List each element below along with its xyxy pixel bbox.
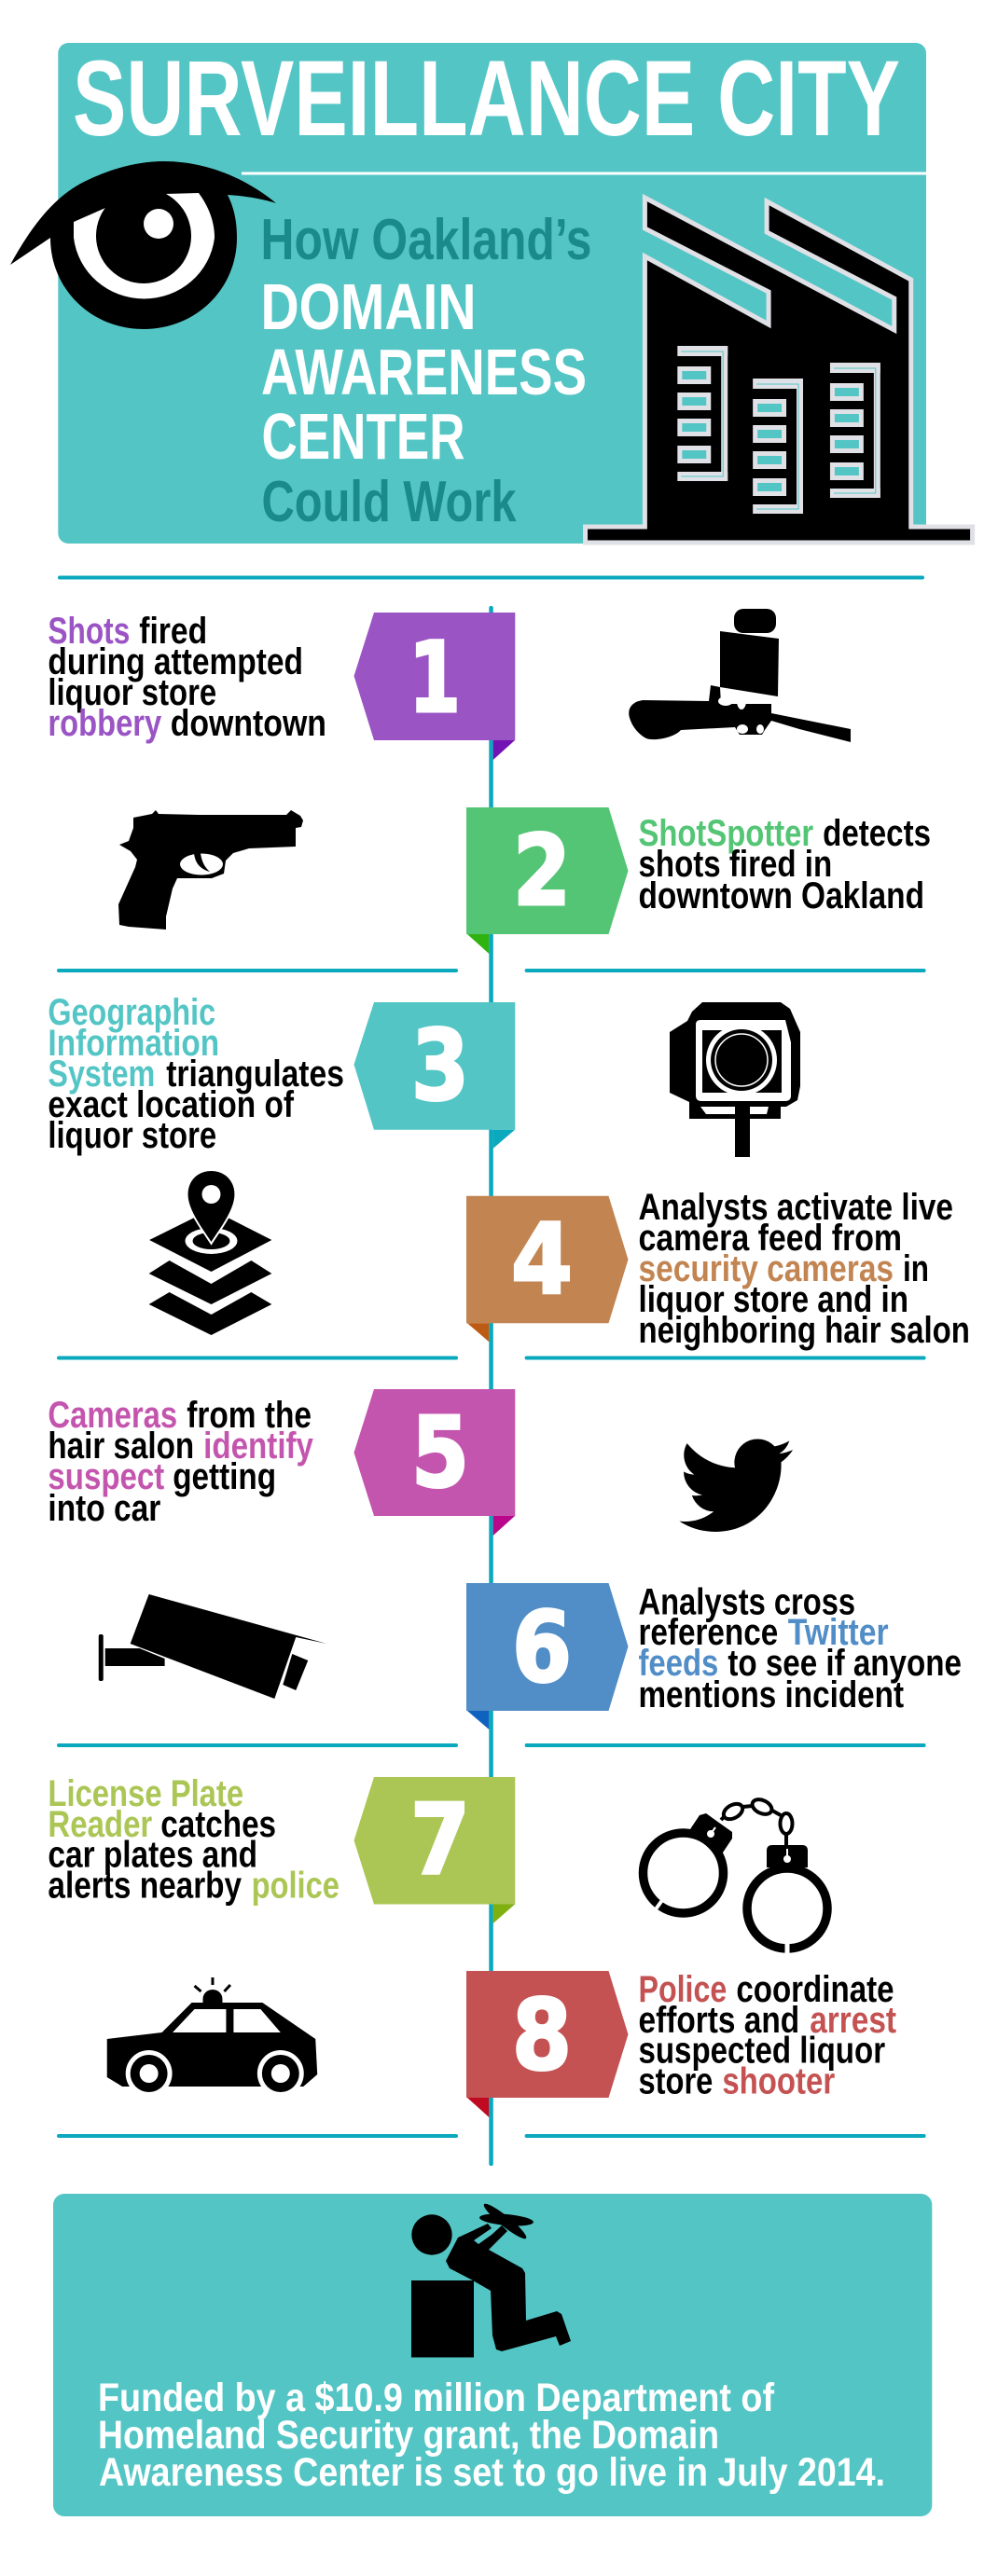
text 4: security cameras bbox=[638, 1248, 894, 1289]
text 8: store bbox=[638, 2060, 713, 2102]
step 4 bbox=[149, 1171, 970, 1351]
text 3: triangulates bbox=[166, 1054, 344, 1095]
dividers bbox=[57, 969, 926, 2138]
text 8: shooter bbox=[722, 2060, 835, 2102]
step 5 bbox=[48, 1389, 793, 1536]
text 6: feeds bbox=[638, 1643, 718, 1684]
step 8 bbox=[107, 1969, 896, 2117]
text 2: ShotSpotter bbox=[638, 813, 813, 854]
text 8: coordinate bbox=[736, 1969, 894, 2010]
timeline bbox=[489, 606, 493, 2166]
step 1 bbox=[48, 609, 851, 760]
footer text: Funded by a $10.9 million Department of bbox=[98, 2376, 775, 2420]
subtitle: CENTER bbox=[261, 400, 464, 473]
badge 4 bbox=[466, 1196, 629, 1342]
icon: security camera front bbox=[670, 1002, 800, 1157]
text 3: Geographic bbox=[48, 992, 215, 1033]
text 4 bbox=[638, 1187, 970, 1351]
subtitle: AWARENESS bbox=[261, 336, 587, 408]
badge 8: 8 bbox=[512, 1978, 572, 2092]
text 3: exact location of bbox=[48, 1084, 295, 1125]
text 3 bbox=[48, 992, 344, 1156]
text 7: License Plate bbox=[48, 1773, 243, 1814]
step 7 bbox=[48, 1773, 827, 1954]
text 2: shots fired in bbox=[638, 844, 832, 885]
text 7: alerts nearby bbox=[48, 1865, 242, 1907]
text 1 bbox=[48, 611, 326, 744]
text 8: arrest bbox=[810, 2000, 896, 2041]
text 1: fired bbox=[139, 611, 207, 652]
text 8: Police bbox=[638, 1969, 727, 2010]
subtitle: DOMAIN bbox=[261, 270, 476, 343]
text 7 bbox=[48, 1773, 340, 1907]
badge 1: 1 bbox=[409, 621, 461, 735]
text 2 bbox=[638, 813, 931, 916]
subtitle bbox=[261, 207, 591, 534]
badge 5 bbox=[354, 1389, 515, 1536]
text 4: camera feed from bbox=[638, 1218, 902, 1259]
badge 7 bbox=[354, 1777, 515, 1923]
text 8: efforts and bbox=[638, 2000, 799, 2041]
text 3: Information bbox=[48, 1023, 219, 1064]
icon: person playing with toy plane on block bbox=[411, 2200, 571, 2357]
text 4: liquor store and in bbox=[638, 1279, 908, 1320]
text 8: suspected liquor bbox=[638, 2031, 885, 2072]
text 5: into car bbox=[48, 1488, 160, 1529]
text 6: Twitter bbox=[788, 1612, 889, 1653]
text 3: liquor store bbox=[48, 1115, 216, 1156]
header background bbox=[58, 43, 926, 544]
badge 8 bbox=[466, 1971, 629, 2117]
text 5: identify bbox=[203, 1426, 313, 1467]
badge 5: 5 bbox=[411, 1396, 469, 1509]
header panel bbox=[10, 39, 973, 544]
badge 2 bbox=[466, 807, 629, 954]
text 1: robbery bbox=[48, 703, 161, 744]
icon: gunshot sensor bbox=[629, 609, 851, 742]
badge 3 bbox=[354, 1002, 515, 1149]
badge 6 bbox=[466, 1583, 629, 1729]
text 5: getting bbox=[173, 1456, 276, 1497]
text 1: liquor store bbox=[48, 672, 216, 713]
text 5 bbox=[48, 1395, 313, 1529]
icon: handcuffs bbox=[644, 1797, 827, 1954]
icon: cctv camera bbox=[99, 1594, 326, 1699]
text 4: in bbox=[903, 1248, 929, 1289]
icon: police car bbox=[107, 1977, 317, 2097]
badge 1 bbox=[354, 613, 515, 760]
icon: pistol bbox=[118, 810, 303, 930]
subtitle: How Oakland’s bbox=[261, 207, 591, 272]
text 6: mentions incident bbox=[638, 1674, 904, 1715]
step 6 bbox=[99, 1581, 962, 1729]
text 7: police bbox=[252, 1865, 340, 1907]
step 2 bbox=[118, 807, 931, 954]
text 7: Reader bbox=[48, 1804, 152, 1845]
text 5: Cameras bbox=[48, 1395, 177, 1436]
footer text bbox=[98, 2376, 885, 2495]
header divider bbox=[58, 576, 924, 580]
text 5: hair salon bbox=[48, 1426, 194, 1467]
text 7: catches bbox=[160, 1804, 276, 1845]
badge 3: 3 bbox=[411, 1009, 469, 1123]
footer text: Homeland Security grant, the Domain bbox=[98, 2413, 719, 2458]
icon: twitter bird bbox=[679, 1439, 793, 1532]
text 5: from the bbox=[187, 1395, 312, 1436]
step 3 bbox=[48, 992, 800, 1157]
text 8 bbox=[638, 1969, 896, 2102]
badge 6: 6 bbox=[512, 1591, 572, 1704]
footer panel bbox=[53, 2194, 932, 2516]
badge 7: 7 bbox=[410, 1783, 470, 1896]
text 1: Shots bbox=[48, 611, 130, 652]
icon: eye bbox=[10, 161, 276, 329]
footer text: Awareness Center is set to go live in July 2014. bbox=[99, 2450, 885, 2495]
badge 4: 4 bbox=[511, 1203, 573, 1316]
text 2: detects bbox=[823, 813, 931, 854]
text 6: reference bbox=[638, 1612, 778, 1653]
subtitle: Could Work bbox=[261, 469, 517, 534]
text 6: Analysts cross bbox=[638, 1581, 855, 1623]
footer background bbox=[53, 2194, 932, 2516]
badge 2: 2 bbox=[513, 814, 571, 928]
text 7: car plates and bbox=[48, 1834, 257, 1876]
text 2: downtown Oakland bbox=[638, 875, 924, 916]
text 3: System bbox=[48, 1054, 155, 1095]
text 5: suspect bbox=[48, 1456, 164, 1497]
icon: building bbox=[586, 198, 973, 543]
icon: map pin and layers bbox=[149, 1171, 271, 1335]
text 6 bbox=[638, 1581, 962, 1715]
text 1: downtown bbox=[171, 703, 326, 744]
text 1: during attempted bbox=[48, 641, 303, 682]
